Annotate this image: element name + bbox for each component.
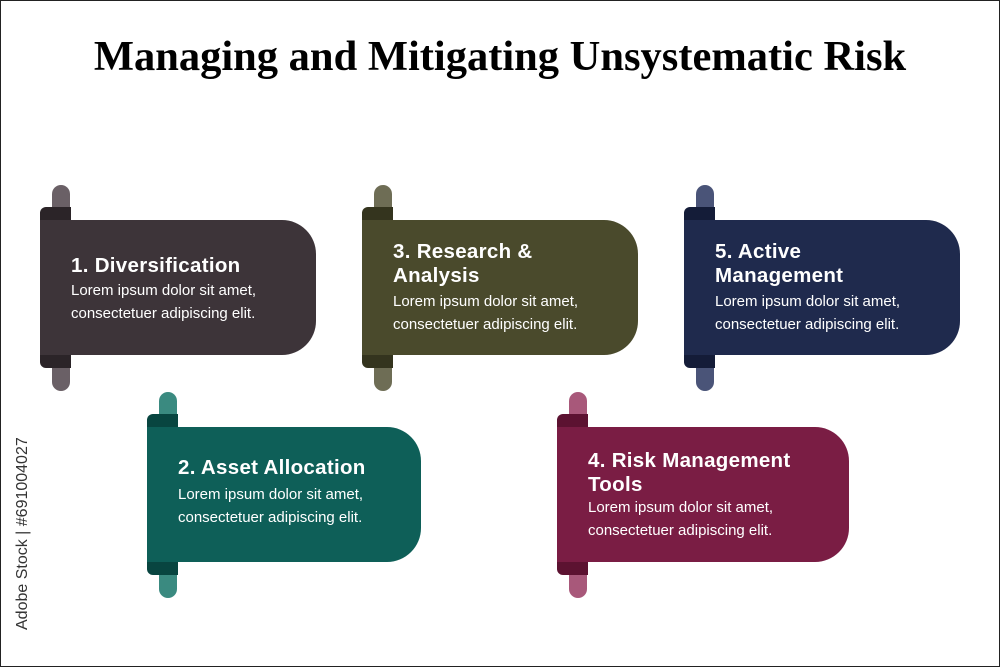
card 1: Diversification: Lorem ipsum dolor sit amet, — [71, 282, 256, 299]
card 5: Active Management: 5. Active — [715, 240, 801, 263]
card 5: Active Management: Lorem ipsum dolor sit amet, — [715, 293, 900, 310]
card 4: Risk Management Tools: Tools — [588, 473, 643, 496]
card 5: Active Management — [684, 185, 960, 391]
card 2: Asset Allocation: consectetuer adipiscing elit. — [178, 509, 362, 526]
card 3: Research & Analysis — [362, 185, 638, 391]
title: Managing and Mitigating Unsystematic Risk — [94, 33, 906, 80]
card 5: Active Management: consectetuer adipiscing elit. — [715, 316, 899, 333]
card 3: Research & Analysis: consectetuer adipiscing elit. — [393, 316, 577, 333]
card 2: Asset Allocation: 2. Asset Allocation — [178, 456, 366, 479]
card 4: Risk Management Tools: consectetuer adipiscing elit. — [588, 522, 772, 539]
card 3: Research & Analysis: Lorem ipsum dolor sit amet, — [393, 293, 578, 310]
watermark id text: Adobe Stock | #691004027 — [14, 437, 31, 630]
card 1: Diversification: 1. Diversification — [71, 254, 240, 277]
card 4: Risk Management Tools — [557, 392, 849, 598]
card 1: Diversification: consectetuer adipiscing elit. — [71, 305, 255, 322]
card 1: Diversification — [40, 185, 316, 391]
card 2: Asset Allocation — [147, 392, 421, 598]
card 4: Risk Management Tools: Lorem ipsum dolor sit amet, — [588, 499, 773, 516]
card 3: Research & Analysis: Analysis — [393, 264, 480, 287]
card 2: Asset Allocation: Lorem ipsum dolor sit amet, — [178, 486, 363, 503]
card 3: Research & Analysis: 3. Research & — [393, 240, 533, 263]
card 4: Risk Management Tools: 4. Risk Management — [588, 449, 790, 472]
card 5: Active Management: Management — [715, 264, 843, 287]
